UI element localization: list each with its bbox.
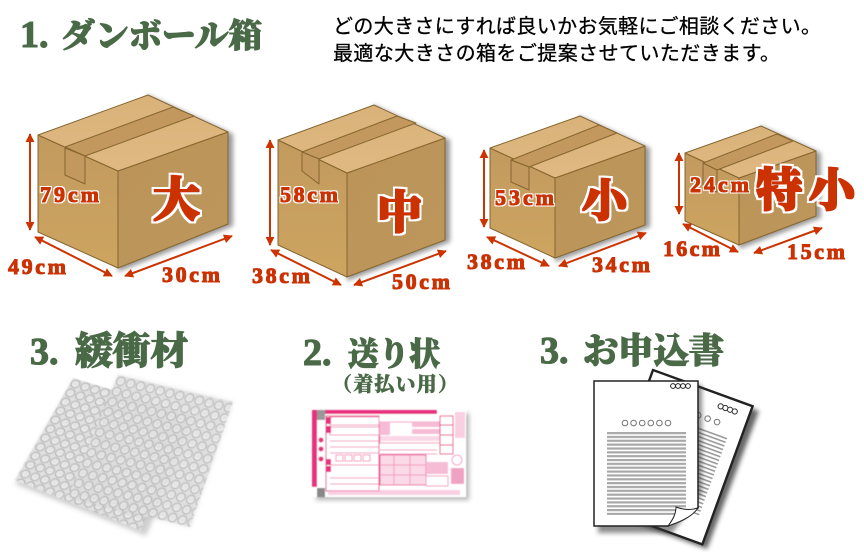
size mark: large: 大 — [153, 163, 200, 230]
label: 58cm: 58cm — [280, 182, 338, 207]
heading: shipping slip: 送り状 — [348, 336, 442, 372]
label: 38cm: 38cm — [252, 263, 310, 288]
label: 30cm: 30cm — [162, 262, 220, 287]
arrow: large width — [125, 236, 232, 276]
arrow: small width — [559, 233, 646, 266]
label: 53cm: 53cm — [495, 185, 554, 210]
heading: cushioning: 緩衝材 — [75, 331, 188, 373]
heading: application form: 3. — [540, 330, 568, 372]
title: cardboard boxes: 1. — [20, 14, 48, 56]
box: small — [467, 116, 650, 277]
size mark: medium: 中 — [377, 176, 422, 241]
size mark: extra small: 特 — [756, 154, 802, 220]
label: 49cm: 49cm — [8, 254, 66, 279]
heading: cushioning: 3. — [30, 331, 58, 373]
label: 15cm: 15cm — [787, 239, 845, 264]
arrow: medium depth — [271, 250, 341, 285]
size mark: extra small — [756, 154, 860, 220]
document: back page — [600, 370, 759, 549]
size mark: small: 小 — [582, 164, 632, 229]
label: 34cm: 34cm — [592, 252, 650, 277]
arrow: extra small depth — [683, 224, 738, 252]
box: medium — [252, 105, 450, 294]
text block: consultation note: どの大きさにすれば良いかお気軽にご相談ください。 — [333, 15, 821, 38]
arrow: medium height — [269, 140, 271, 245]
label: 16cm: 16cm — [663, 236, 720, 261]
heading: shipping slip: 2. — [303, 332, 332, 374]
illustration: shipping slip form — [312, 410, 469, 500]
subheading: cash on delivery: （着払い用） — [332, 372, 458, 396]
arrow: extra small width — [754, 228, 822, 253]
page curl — [668, 507, 698, 526]
label: 50cm: 50cm — [392, 269, 450, 294]
size mark: extra small: 小 — [809, 154, 860, 220]
text block: consultation note: 最適な大きさの箱をご提案させていただきます。 — [333, 42, 780, 65]
arrow: extra small height — [678, 153, 680, 214]
arrow: small depth — [487, 237, 549, 266]
heading: shipping slip — [303, 332, 442, 374]
text block: consultation note — [333, 15, 821, 65]
arrow: small height — [483, 150, 485, 227]
label: 38cm: 38cm — [467, 249, 525, 274]
box: large — [8, 95, 233, 287]
label: 79cm: 79cm — [40, 182, 99, 207]
arrow: medium width — [354, 251, 446, 285]
illustration: bubble sheets — [15, 375, 233, 536]
illustration: application documents — [594, 370, 759, 549]
arrow: large height — [29, 134, 31, 230]
box: extra small — [663, 126, 860, 264]
title: cardboard boxes: ダンボール箱 — [61, 18, 262, 55]
heading: application form: お申込書 — [583, 332, 724, 371]
document: front page — [594, 381, 702, 533]
arrow: large depth — [35, 237, 112, 276]
label: 24cm: 24cm — [690, 172, 749, 197]
